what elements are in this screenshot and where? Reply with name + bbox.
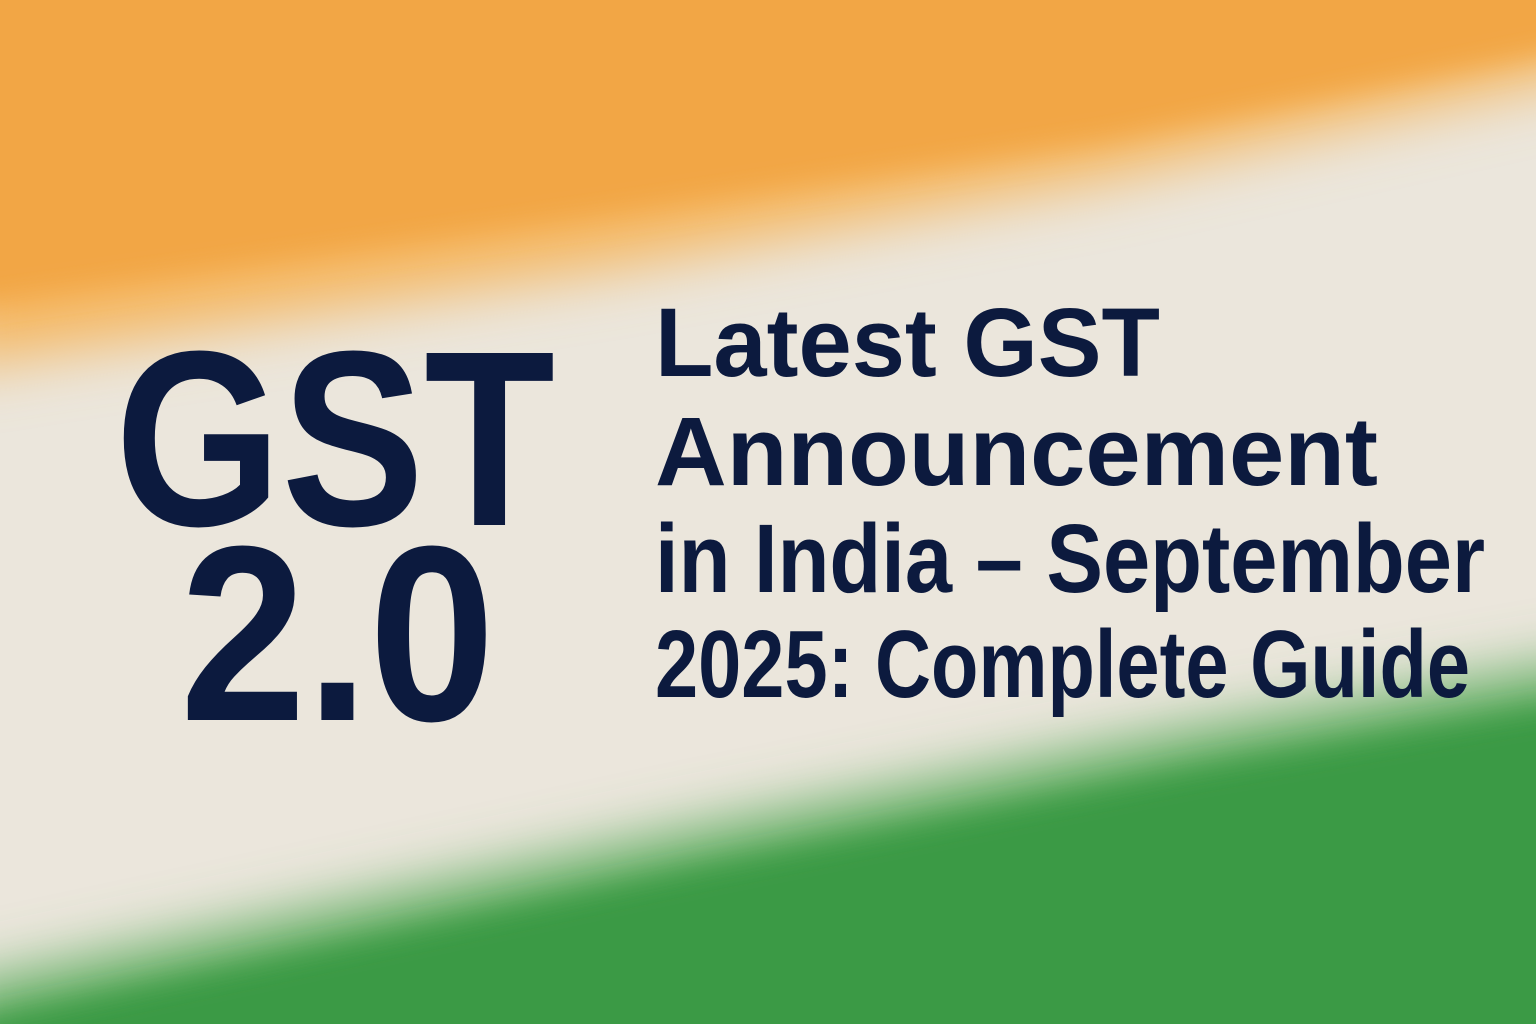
big title: GST 2.0 (115, 299, 555, 773)
subtitle text block: Announcement (655, 397, 1378, 506)
green band (0, 660, 1536, 1024)
subtitle text block: Latest GST (655, 288, 1160, 397)
big title: GST 2.0: GST (115, 299, 555, 578)
saffron band (0, 0, 1536, 370)
subtitle text block (655, 288, 1485, 718)
big title: GST 2.0: 2.0 (180, 494, 495, 773)
